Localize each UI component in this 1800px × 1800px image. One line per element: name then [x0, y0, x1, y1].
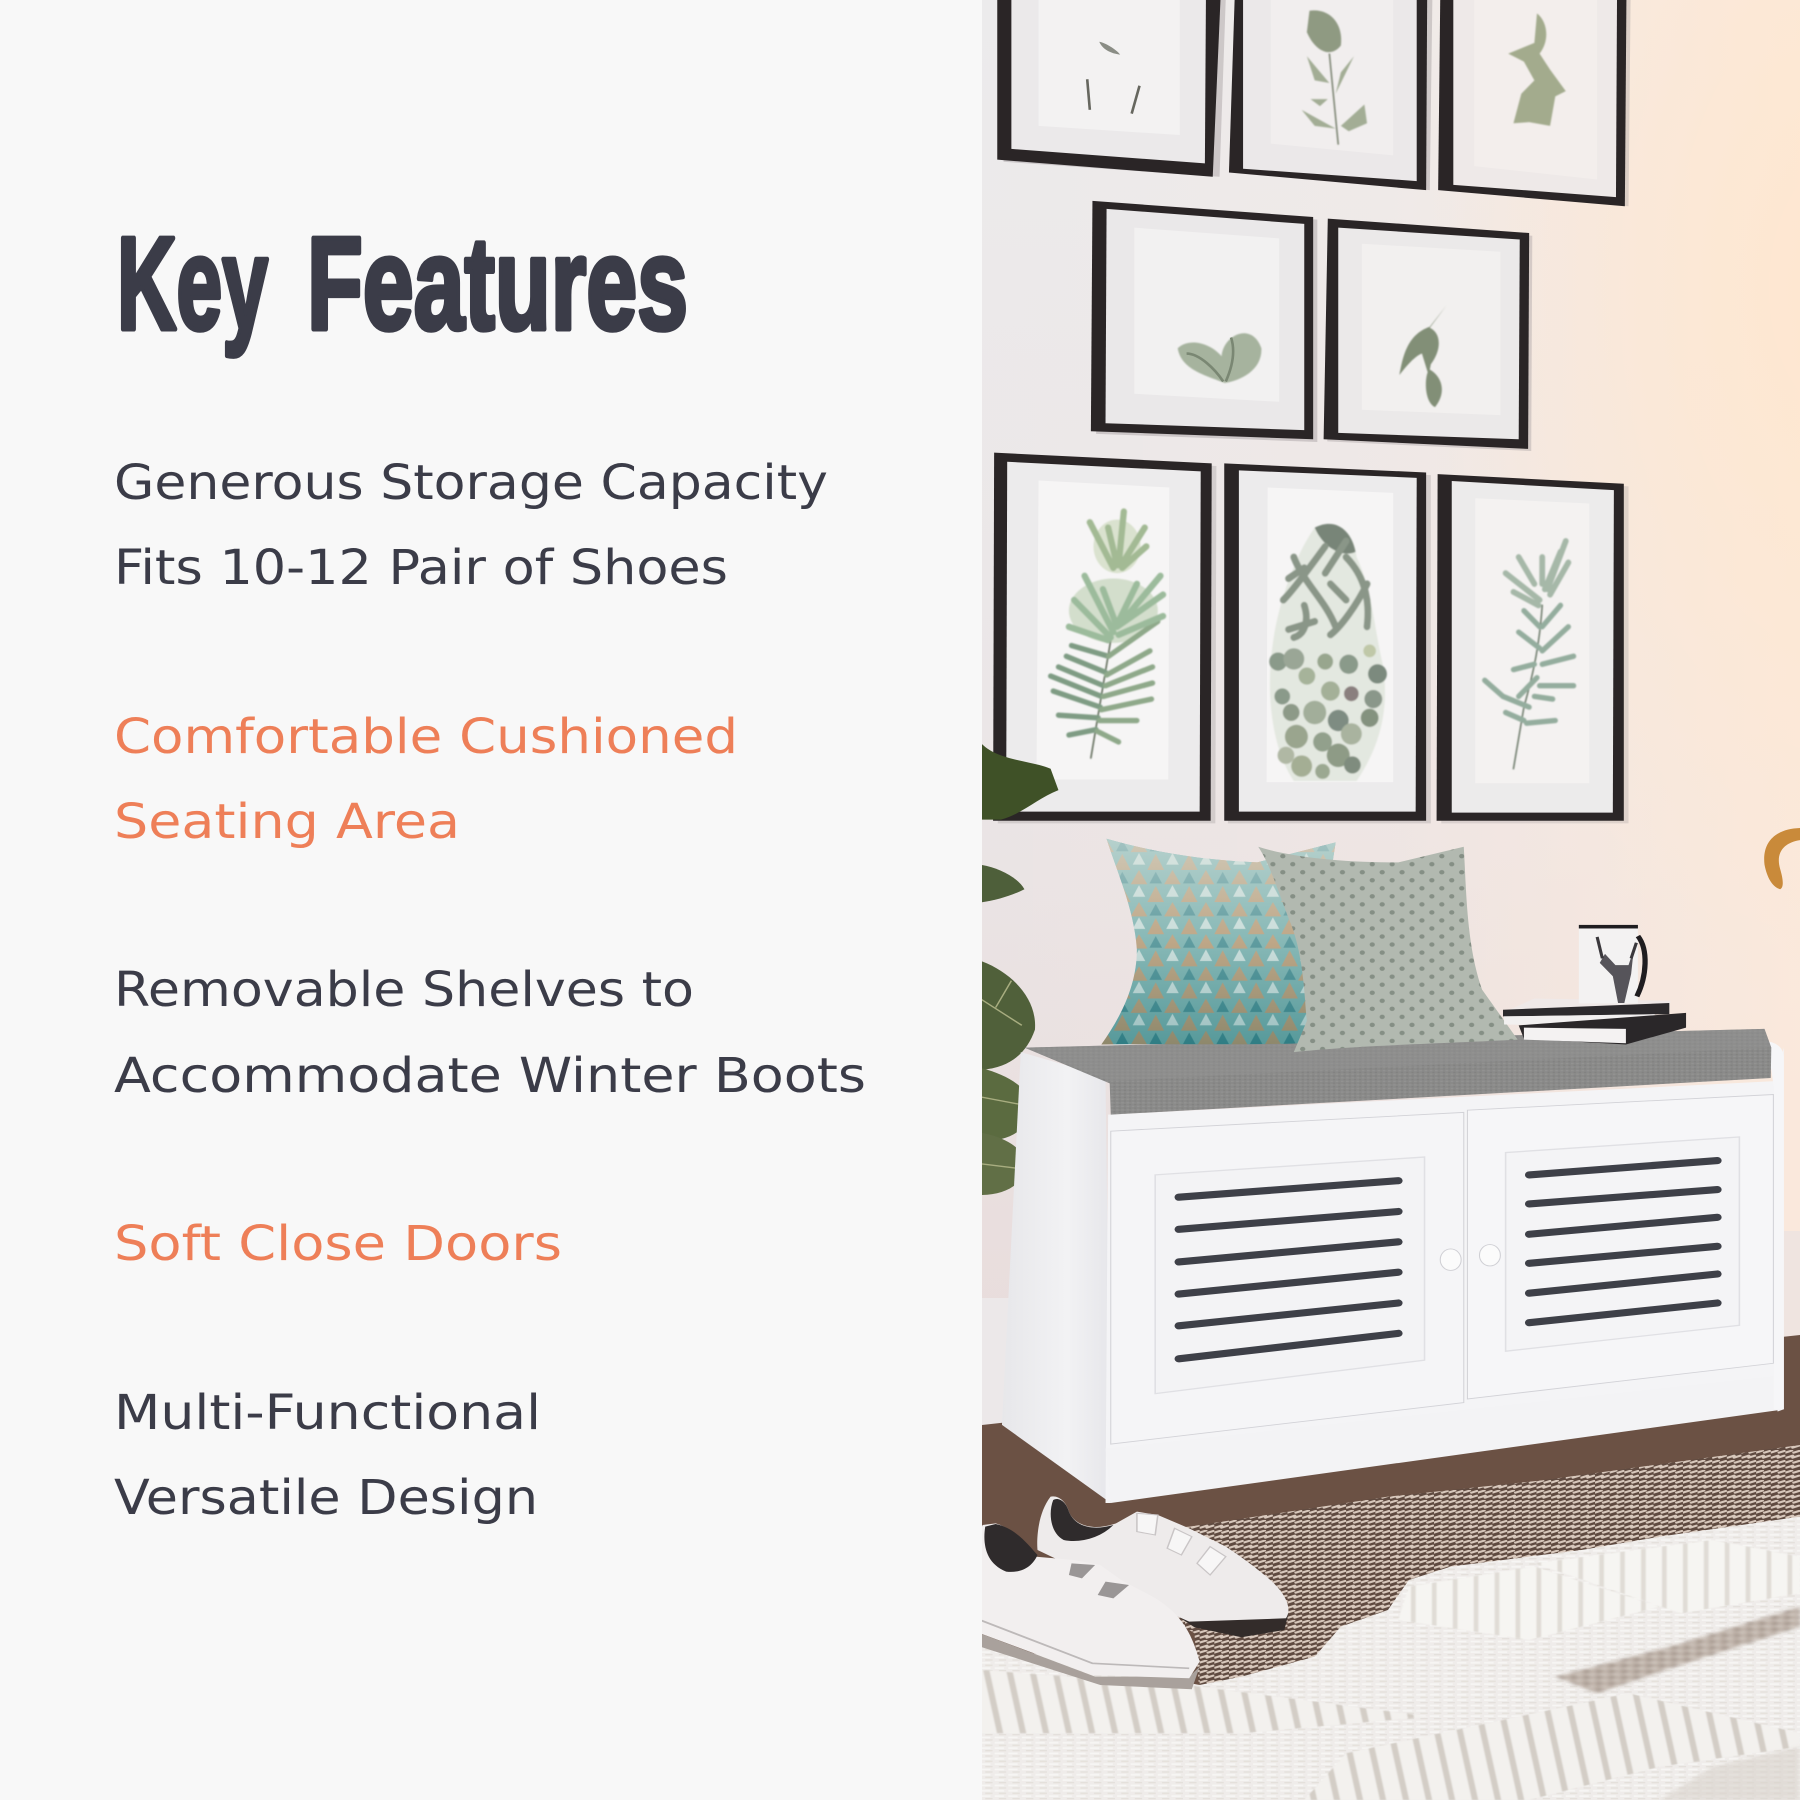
feature: removable shelves: Accommodate Winter Boots	[114, 1048, 866, 1104]
door knobs	[1440, 1245, 1500, 1270]
hook on wall	[1764, 828, 1800, 889]
left panel background	[0, 0, 982, 1800]
frame 2	[1229, 0, 1432, 190]
feature: multi-functional design: Multi-Functional	[114, 1385, 541, 1441]
feature: removable shelves: Removable Shelves to	[114, 962, 694, 1018]
frame 5	[1324, 219, 1532, 451]
feature: soft close doors: Soft Close Doors	[114, 1216, 562, 1272]
seat cushion	[1024, 1029, 1771, 1115]
feature: comfortable cushioned seating: Seating Area	[114, 794, 460, 850]
bench group	[980, 828, 1800, 1503]
feature: generous storage capacity: Fits 10-12 Pair of Shoes	[114, 540, 728, 596]
mug with deer	[1579, 925, 1645, 1003]
wood floor	[982, 1335, 1800, 1685]
shoe front	[980, 1523, 1200, 1689]
books	[1503, 999, 1686, 1045]
feature: generous storage capacity	[114, 455, 828, 596]
feature: comfortable cushioned seating: Comfortable Cushioned	[114, 709, 738, 765]
pillow teal	[1101, 839, 1336, 1045]
plant behind bench	[980, 865, 1035, 1195]
rug and shoes	[980, 1445, 1800, 1800]
shoe back	[1037, 1496, 1289, 1637]
frame 8 with fern	[1437, 474, 1629, 823]
feature: removable shelves	[114, 962, 866, 1104]
gallery wall frames	[980, 0, 1631, 823]
rug light field	[980, 1517, 1800, 1800]
bench front	[1106, 1048, 1784, 1503]
frame 6 with palm leaf	[993, 453, 1216, 823]
title: Features	[307, 210, 688, 357]
photo panel	[980, 0, 1800, 1800]
frame 1	[997, 0, 1226, 177]
feature: multi-functional design: Versatile Design	[114, 1470, 538, 1526]
bench side panel	[1002, 1052, 1111, 1503]
title	[117, 210, 688, 357]
rug stripes	[980, 1540, 1800, 1800]
right side top lip	[1769, 1042, 1784, 1410]
door right	[1467, 1095, 1773, 1399]
title: Key	[117, 210, 268, 357]
feature: comfortable cushioned seating	[114, 709, 738, 850]
rug dark border	[1177, 1445, 1800, 1685]
frame 3	[1438, 0, 1631, 206]
wall	[982, 0, 1800, 1440]
frame 7 with eucalyptus	[1224, 463, 1431, 823]
pillow grey	[1258, 847, 1518, 1052]
frame 4	[1091, 201, 1317, 442]
plant leaf over frame	[980, 742, 1058, 820]
feature: multi-functional design	[114, 1385, 541, 1526]
door left	[1111, 1112, 1464, 1444]
feature: generous storage capacity: Generous Storage Capacity	[114, 455, 828, 511]
baseboard	[982, 1231, 1800, 1425]
